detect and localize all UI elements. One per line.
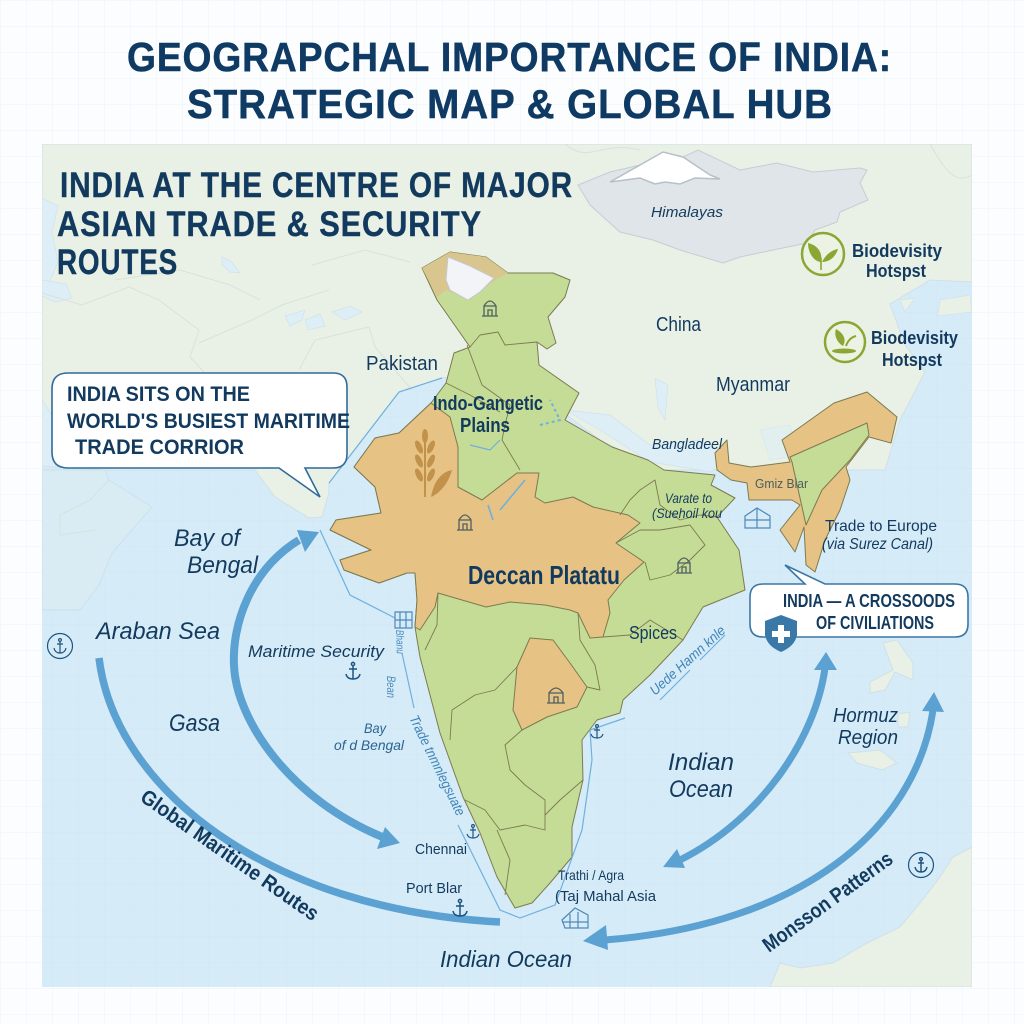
labels: countries and regions: Deccan Platatu [468, 560, 620, 590]
Himalayas [578, 150, 868, 263]
labels: small rotated routes: Uede Hamn knle [646, 622, 728, 698]
surrounding land [42, 144, 972, 987]
labels: seas: Indian Ocean [440, 946, 572, 972]
labels: ports: Trathi / Agra [558, 867, 624, 883]
labels: seas: Bay [364, 720, 387, 736]
map heading: INDIA AT THE CENTRE OF MAJOR [60, 166, 573, 205]
label: biodiversity 1 [852, 241, 942, 281]
labels: ports: Port Blar [406, 880, 462, 897]
labels: seas: Bay of [174, 525, 242, 552]
state borders [425, 332, 717, 895]
title [127, 34, 892, 127]
panel: map [42, 144, 1006, 987]
title: GEOGRAPCHAL IMPORTANCE OF INDIA: [127, 34, 892, 80]
icons: monuments [457, 301, 692, 703]
label: biodiversity 2 [871, 328, 958, 370]
labels: small rotated routes: Bhanu [393, 630, 406, 654]
labels: countries and regions: Gmiz Blar [755, 476, 809, 491]
labels: seas: Hormuz [833, 705, 898, 727]
labels: countries and regions [366, 204, 937, 643]
icon: biodiversity 1 [802, 233, 844, 275]
icon: biodiversity 2 [825, 322, 865, 362]
arrow: Indian Ocean [663, 652, 837, 868]
labels: seas: Indian [668, 749, 734, 776]
arrow: monsoon [583, 692, 944, 950]
labels: countries and regions: (via Surez Canal) [822, 536, 933, 553]
outlying island [990, 636, 1006, 654]
labels: countries and regions: (Suehoil kou [652, 505, 722, 521]
label: biodiversity 2: Biodevisity [871, 328, 958, 348]
icons: anchors [48, 634, 934, 916]
labels: countries and regions: Spices [629, 623, 677, 643]
labels: small rotated routes: Bean [384, 676, 398, 698]
callout: crossroads: OF CIVILIATIONS [816, 613, 934, 633]
rivers and routes [320, 378, 725, 918]
label: biodiversity 1: Biodevisity [852, 241, 942, 261]
Kashmir tan [422, 252, 508, 300]
label: biodiversity 1: Hotspst [866, 261, 926, 281]
labels: ports: Chennai [415, 841, 467, 858]
icons: port structures [395, 508, 770, 928]
callout: maritime corridor: WORLD'S BUSIEST MARITIME [67, 410, 350, 433]
label: monsoon patterns: Monsson Patterns [758, 847, 897, 957]
labels: seas: Ocean [669, 776, 733, 803]
labels: small rotated routes [384, 622, 728, 818]
Kashmir snow [446, 257, 494, 300]
labels: countries and regions: Himalayas [651, 204, 724, 221]
icon: wheat [413, 429, 452, 497]
labels: seas: Region [838, 727, 898, 749]
labels: ports [406, 841, 657, 905]
callout: crossroads [750, 565, 968, 652]
arrow: global maritime route [99, 658, 500, 922]
label: global maritime routes: Global Maritime Routes [136, 785, 323, 926]
land contours [42, 144, 972, 535]
labels: countries and regions: Varate to [665, 490, 712, 506]
labels: countries and regions: Bangladeel [652, 436, 723, 453]
labels: seas: of d Bengal [334, 737, 405, 753]
India land [330, 252, 745, 908]
labels: ports: (Taj Mahal Asia [555, 888, 657, 905]
callout: crossroads: INDIA — A CROSSOODS [783, 591, 955, 611]
map heading: ROUTES [57, 243, 178, 282]
arrow: western loop [234, 530, 400, 849]
labels: countries and regions: Plains [460, 415, 510, 437]
map heading [58, 172, 572, 274]
ocean background [42, 280, 972, 987]
icon: shield [765, 615, 797, 652]
labels: seas: Maritime Security [248, 642, 386, 661]
Deccan region [330, 403, 644, 638]
labels: countries and regions: China [656, 314, 702, 336]
labels: countries and regions: Myanmar [716, 374, 790, 396]
callout: maritime corridor [52, 373, 350, 497]
inland water [42, 198, 972, 472]
map heading: ASIAN TRADE & SECURITY [57, 205, 482, 244]
labels: seas [94, 525, 898, 972]
callout: maritime corridor: TRADE CORRIOR [75, 436, 244, 459]
labels: small rotated routes: Trade tnmnlegsuate [406, 712, 469, 818]
labels: countries and regions: Trade to Europe [825, 518, 937, 535]
India map [330, 252, 897, 908]
Telangana region [513, 638, 587, 730]
labels: seas: Gasa [169, 710, 220, 737]
NE India [715, 392, 897, 572]
labels: seas: Bengal [187, 552, 259, 579]
labels: countries and regions: Pakistan [366, 353, 438, 375]
snow cap [610, 152, 720, 184]
title: STRATEGIC MAP & GLOBAL HUB [187, 81, 833, 127]
labels: seas: Araban Sea [94, 618, 220, 645]
labels: countries and regions: Indo-Gangetic [433, 393, 543, 415]
label: biodiversity 2: Hotspst [882, 350, 942, 370]
callout: maritime corridor: INDIA SITS ON THE [67, 383, 250, 406]
